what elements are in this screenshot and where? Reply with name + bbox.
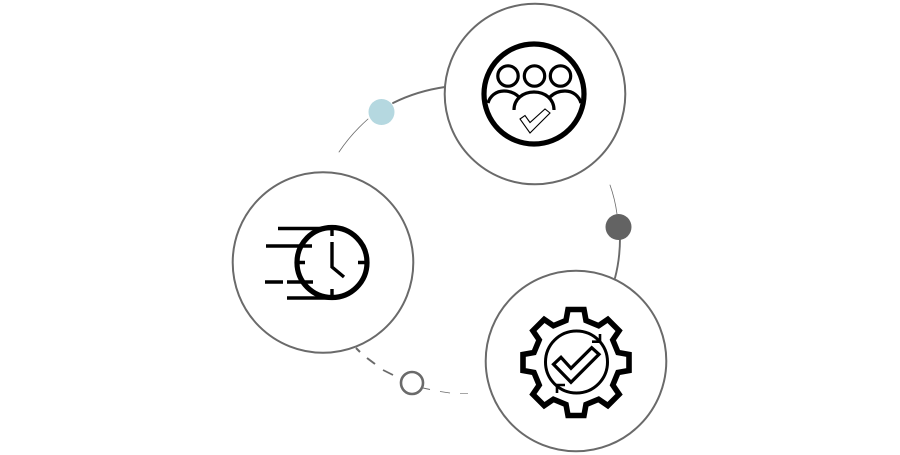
- arc: right connector: [610, 185, 620, 278]
- panel: gear circle: [486, 271, 666, 451]
- icon: team with check mark: [484, 44, 584, 144]
- dot: light teal: [368, 99, 394, 125]
- panel: team circle: [445, 4, 625, 184]
- icon: gear with check mark: [523, 310, 629, 416]
- panel: speed clock circle: [233, 172, 413, 353]
- icon: fast clock: [265, 228, 367, 298]
- arc: top-left connector: [339, 87, 445, 152]
- arc: bottom dashed connector: [356, 348, 468, 394]
- dot: hollow ring: [401, 372, 423, 394]
- dot: dark grey: [606, 214, 632, 240]
